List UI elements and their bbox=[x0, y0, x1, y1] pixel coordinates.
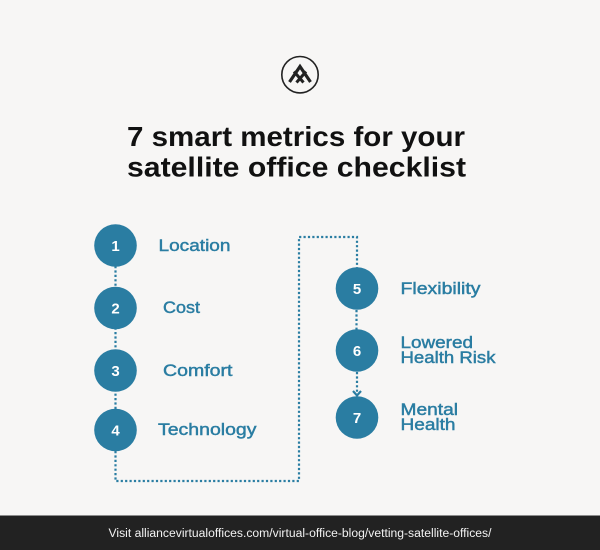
connector: step 5 to step 6 bbox=[355, 310, 358, 330]
step 7: Mental bbox=[400, 401, 458, 419]
connector: step 4 to step 5 bbox=[116, 237, 357, 481]
title bbox=[127, 121, 466, 182]
icon: logo bbox=[282, 56, 318, 93]
footer bar bbox=[0, 516, 600, 550]
step 3 bbox=[94, 349, 233, 392]
step 7 bbox=[336, 396, 458, 439]
arrow: step 6 to step 7 bbox=[353, 372, 361, 396]
step 5: Flexibility bbox=[400, 280, 481, 298]
step 4 bbox=[94, 409, 257, 451]
step 3: Comfort bbox=[163, 362, 233, 380]
footer bar: Visit alliancevirtualoffices.com/virtual-office-blog/vetting-satellite-offices/ bbox=[108, 528, 492, 540]
step 6: 6 bbox=[353, 343, 361, 360]
step 3: 3 bbox=[111, 363, 120, 380]
step 2: 2 bbox=[111, 300, 120, 318]
step 4: Technology bbox=[158, 421, 257, 439]
title: 7 smart metrics for your bbox=[127, 121, 465, 152]
step 5: 5 bbox=[353, 281, 361, 298]
step 6: Lowered bbox=[400, 334, 473, 352]
step 1 bbox=[94, 224, 230, 267]
step 2: Cost bbox=[163, 299, 200, 317]
step 1: 1 bbox=[111, 238, 120, 255]
step 7: Health bbox=[400, 416, 456, 434]
step 2 bbox=[94, 287, 200, 329]
step 6: Health Risk bbox=[400, 349, 496, 367]
title: satellite office checklist bbox=[127, 152, 466, 182]
step 1: Location bbox=[158, 237, 230, 255]
connector: steps 1 to 4 bbox=[114, 266, 117, 410]
step 6 bbox=[336, 329, 496, 372]
step 5 bbox=[336, 267, 481, 310]
step 4: 4 bbox=[111, 422, 120, 440]
step 7: 7 bbox=[353, 410, 361, 427]
